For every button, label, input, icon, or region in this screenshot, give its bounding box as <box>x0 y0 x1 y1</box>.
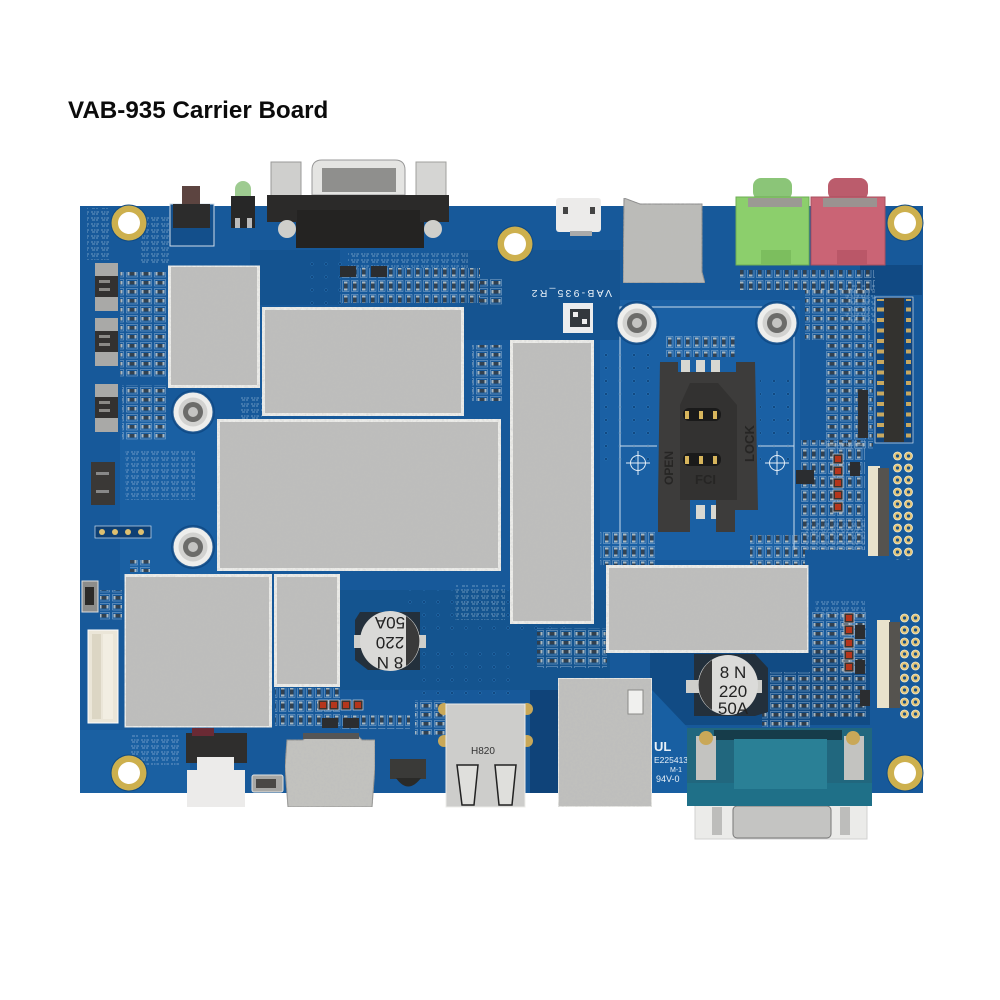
micro usb <box>556 198 601 236</box>
hdmi connector <box>285 733 375 807</box>
capacitor right: 50A <box>718 699 749 718</box>
capacitor left <box>354 611 426 672</box>
rf shields <box>124 266 808 728</box>
microsd socket <box>623 198 705 283</box>
crosshair: right <box>765 451 789 475</box>
green led <box>231 181 255 228</box>
dark bottom component <box>390 759 426 786</box>
certification marks: M-1 <box>670 767 682 774</box>
crosshair: left <box>626 451 650 475</box>
silkscreen text blocks <box>87 208 875 765</box>
usb connector <box>438 703 533 807</box>
certification marks: 94V-0 <box>656 774 680 784</box>
sim card socket <box>658 360 758 532</box>
qr label <box>563 303 593 333</box>
mounting holes <box>110 204 924 792</box>
ethernet window <box>628 690 643 714</box>
capacitor left: 8 N <box>377 653 403 672</box>
audio jack bottom <box>186 728 247 807</box>
capacitor right: 8 N <box>720 663 746 682</box>
vga connector top <box>267 160 449 248</box>
red inductors <box>318 454 854 710</box>
line-out jack <box>736 178 809 265</box>
capacitor left: 220 <box>376 633 404 652</box>
gold pin holes upper <box>892 450 914 560</box>
via fields <box>300 255 800 700</box>
pin header row <box>95 526 151 538</box>
certification marks: E225413 <box>654 755 688 765</box>
mic-in jack <box>811 178 885 265</box>
connector: small header <box>91 462 115 505</box>
board revision label: VAB-935_R2 <box>529 287 612 299</box>
usb connector: H820 <box>471 746 495 757</box>
fpc connector upper <box>868 466 889 556</box>
hdmi connector pins <box>303 733 359 739</box>
surface-mount components <box>100 268 875 735</box>
left side switch <box>82 581 98 612</box>
mounting screws <box>171 301 799 569</box>
sim card socket: FCI <box>695 472 716 487</box>
expansion header <box>875 297 913 443</box>
white wire connector <box>88 630 118 723</box>
integrated circuits <box>322 266 870 728</box>
capacitor right: 220 <box>719 682 747 701</box>
small bottom switch <box>252 775 283 792</box>
sim card socket: LOCK <box>742 425 757 462</box>
fpc connector lower <box>877 620 900 708</box>
certification marks: UL <box>654 739 671 754</box>
gold pin holes lower <box>899 612 921 720</box>
board copper planes <box>80 250 922 793</box>
connector: left two-pin headers <box>95 263 118 432</box>
ethernet connector <box>558 678 652 807</box>
title: VAB-935 Carrier Board <box>68 97 328 124</box>
serial connector bottom <box>687 728 872 839</box>
sim socket outline <box>620 307 794 550</box>
certification marks <box>654 739 688 784</box>
power button <box>170 186 214 246</box>
panel: circuit board <box>80 206 923 793</box>
capacitor right <box>686 654 768 718</box>
sim card socket: OPEN <box>662 451 676 485</box>
capacitor left: 50A <box>374 613 405 632</box>
